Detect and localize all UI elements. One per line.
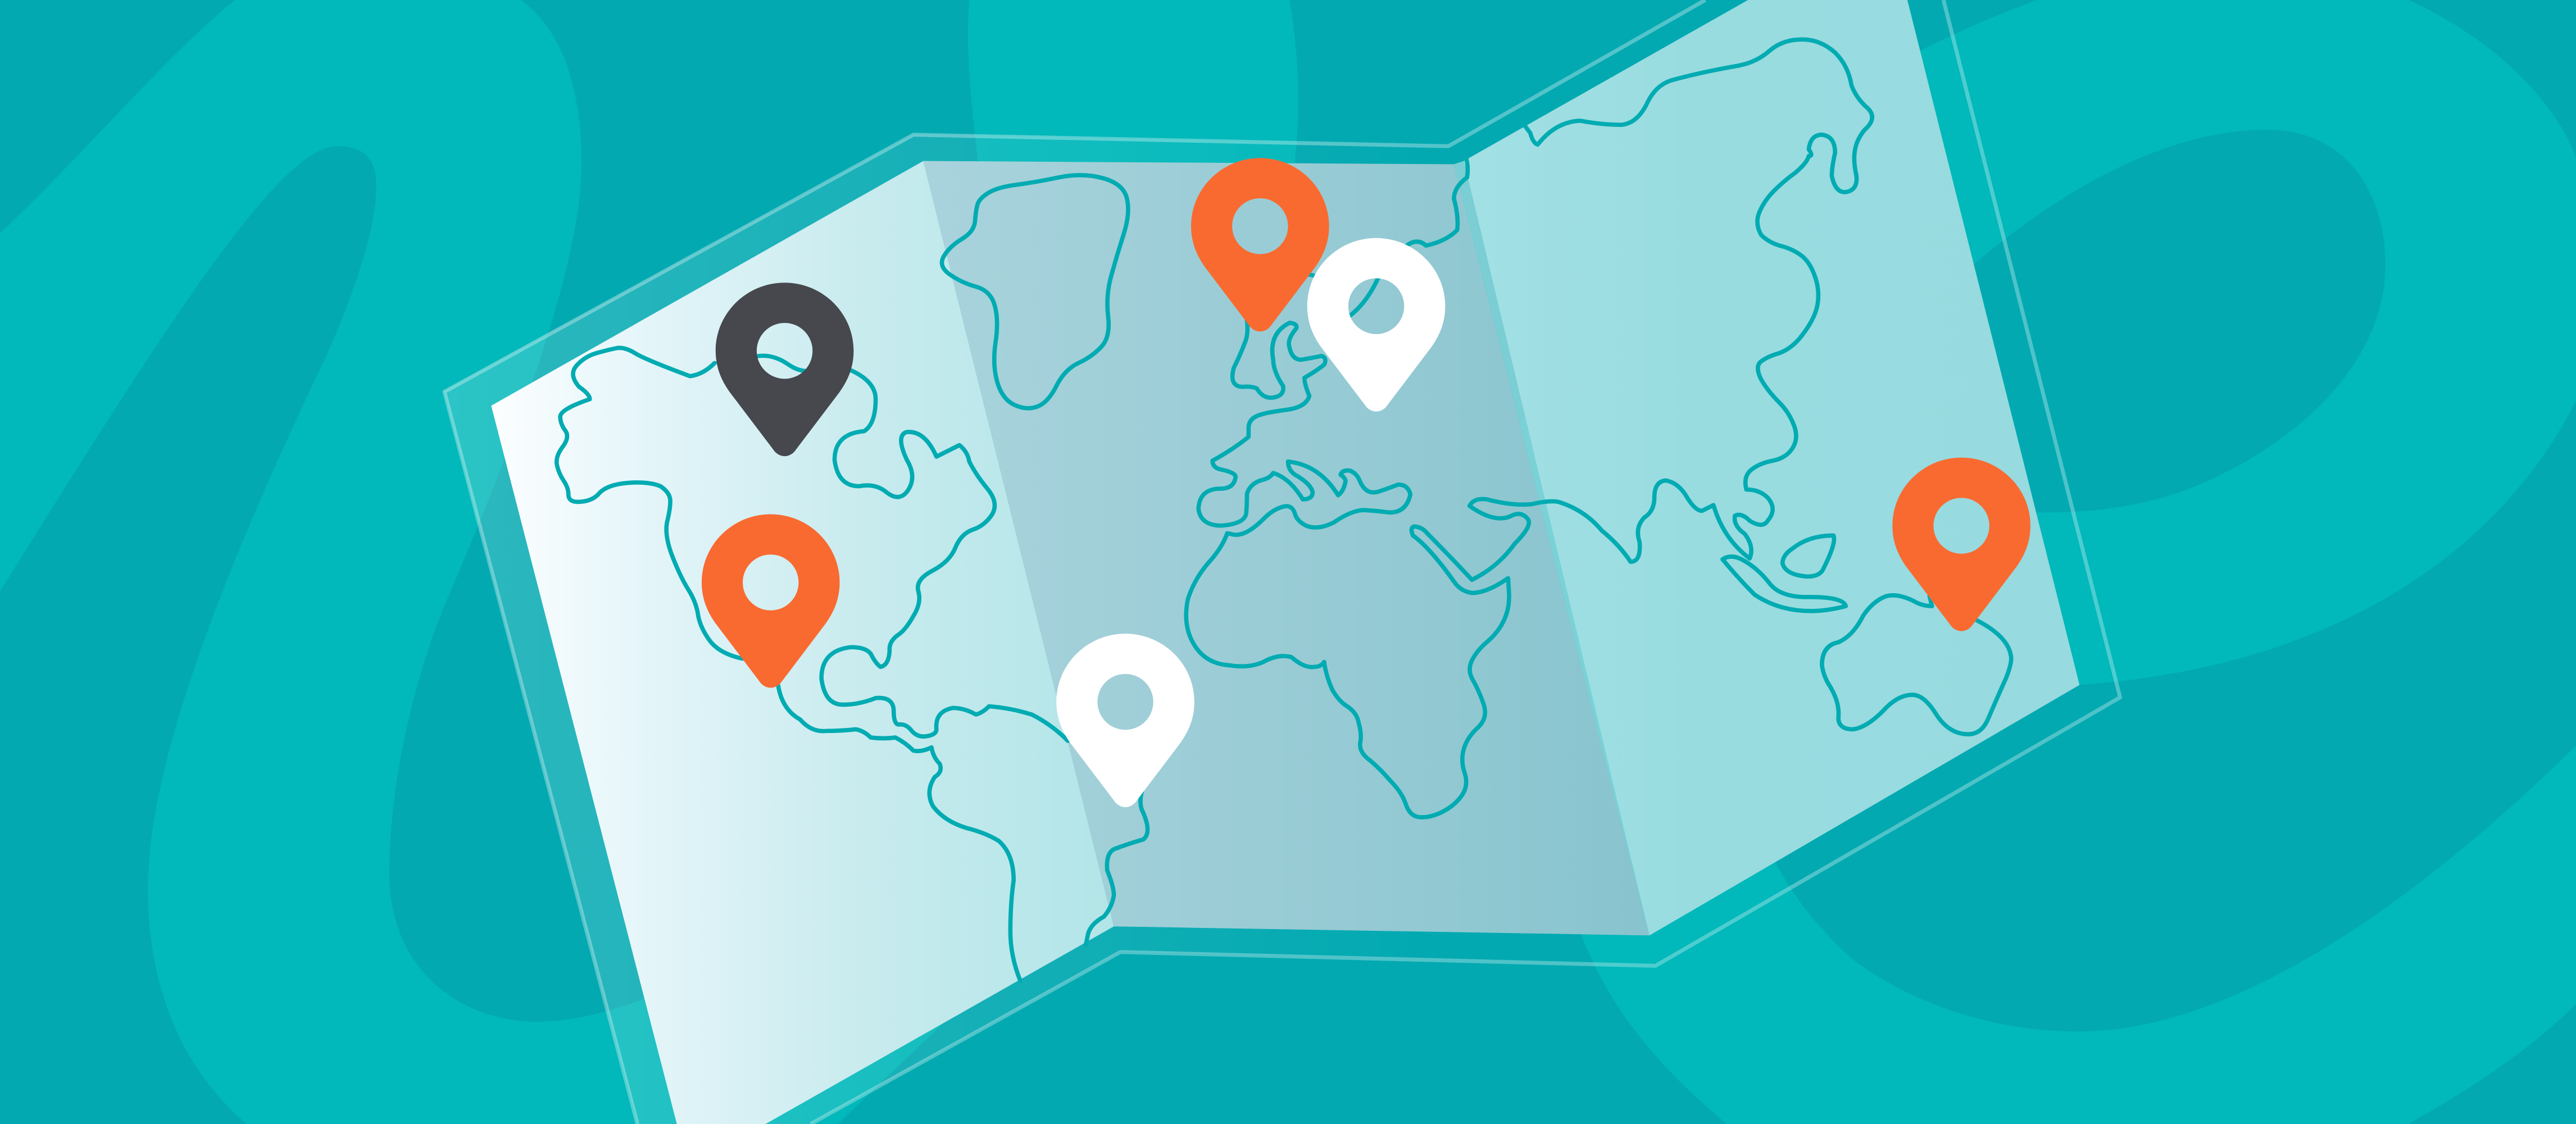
map panel: centre fold	[923, 161, 1650, 935]
Africa, Middle East and Asia	[1186, 39, 1872, 817]
coastlines	[557, 39, 2011, 981]
icon: orange map pin, Oceania	[1892, 458, 2030, 631]
Europe and Mediterranean	[1198, 320, 1410, 535]
North America east coast	[756, 356, 1068, 741]
South America east coast	[1086, 791, 1147, 944]
fold highlight	[1454, 161, 1650, 935]
icon: dark map pin	[716, 283, 853, 456]
icon: white map pin, Atlantic	[1056, 634, 1194, 807]
map panel: left fold	[491, 161, 1114, 1124]
Southeast Asia peninsula	[1723, 557, 1846, 611]
icon: orange map pin, Europe	[1191, 158, 1329, 331]
island	[1783, 535, 1834, 576]
icon: orange map pin, Americas	[702, 515, 840, 688]
Scandinavia and Russia coast	[1308, 158, 1468, 315]
icon: white map pin, Europe	[1307, 238, 1445, 412]
map margin and outline	[444, 0, 2120, 1124]
Greenland	[942, 175, 1128, 408]
South America west coast	[778, 685, 1020, 981]
North America west coast	[557, 348, 743, 659]
map panel: right fold	[1464, 0, 2079, 935]
Australia	[1822, 595, 2011, 734]
